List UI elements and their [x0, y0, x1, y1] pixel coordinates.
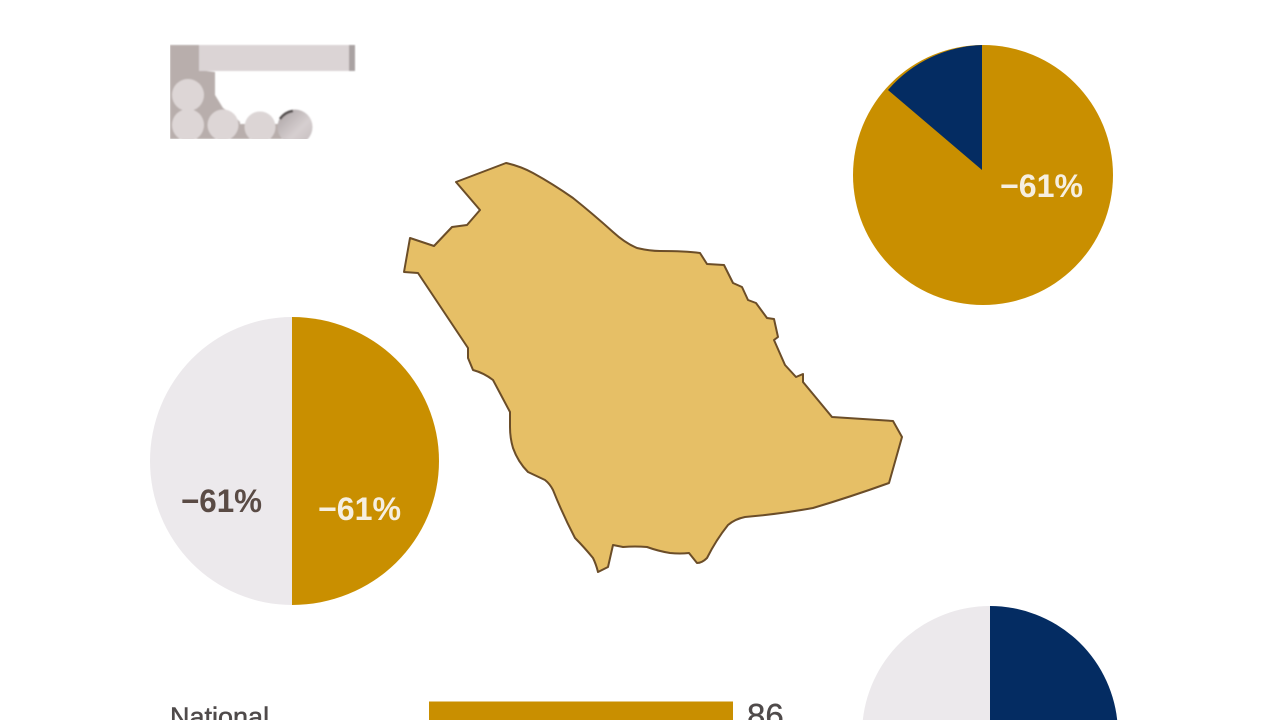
icon log 5 highlight [280, 111, 293, 119]
icon log 1 [172, 79, 204, 111]
icon log 5 [277, 108, 313, 139]
bar row: National [172, 702, 782, 720]
pie chart: left [150, 317, 439, 605]
pie slice: navy [888, 45, 982, 170]
pie slice: navy [990, 606, 1117, 720]
bar [429, 702, 733, 720]
icon log 4 backing [239, 123, 282, 139]
map: Saudi Arabia region [404, 163, 902, 572]
pie chart: top right [853, 45, 1113, 305]
pie slice: gold [292, 317, 439, 605]
icon: stacked logs under a beam [170, 45, 355, 144]
icon log 4 [244, 112, 276, 142]
pie label: grey side: −61% [181, 483, 262, 519]
pie slice: light grey [150, 317, 292, 605]
icon log 2 [172, 109, 204, 141]
icon beam end cap [349, 45, 355, 71]
pie label: gold side: −61% [318, 491, 401, 527]
icon beam [199, 45, 349, 71]
icon backing shape [170, 45, 240, 139]
pie slice: light grey [863, 606, 990, 720]
pie slice: gold [853, 45, 1113, 305]
pie chart: bottom right [863, 606, 1117, 720]
icon log 3 [208, 110, 238, 140]
pie label: −61% [1000, 168, 1083, 204]
